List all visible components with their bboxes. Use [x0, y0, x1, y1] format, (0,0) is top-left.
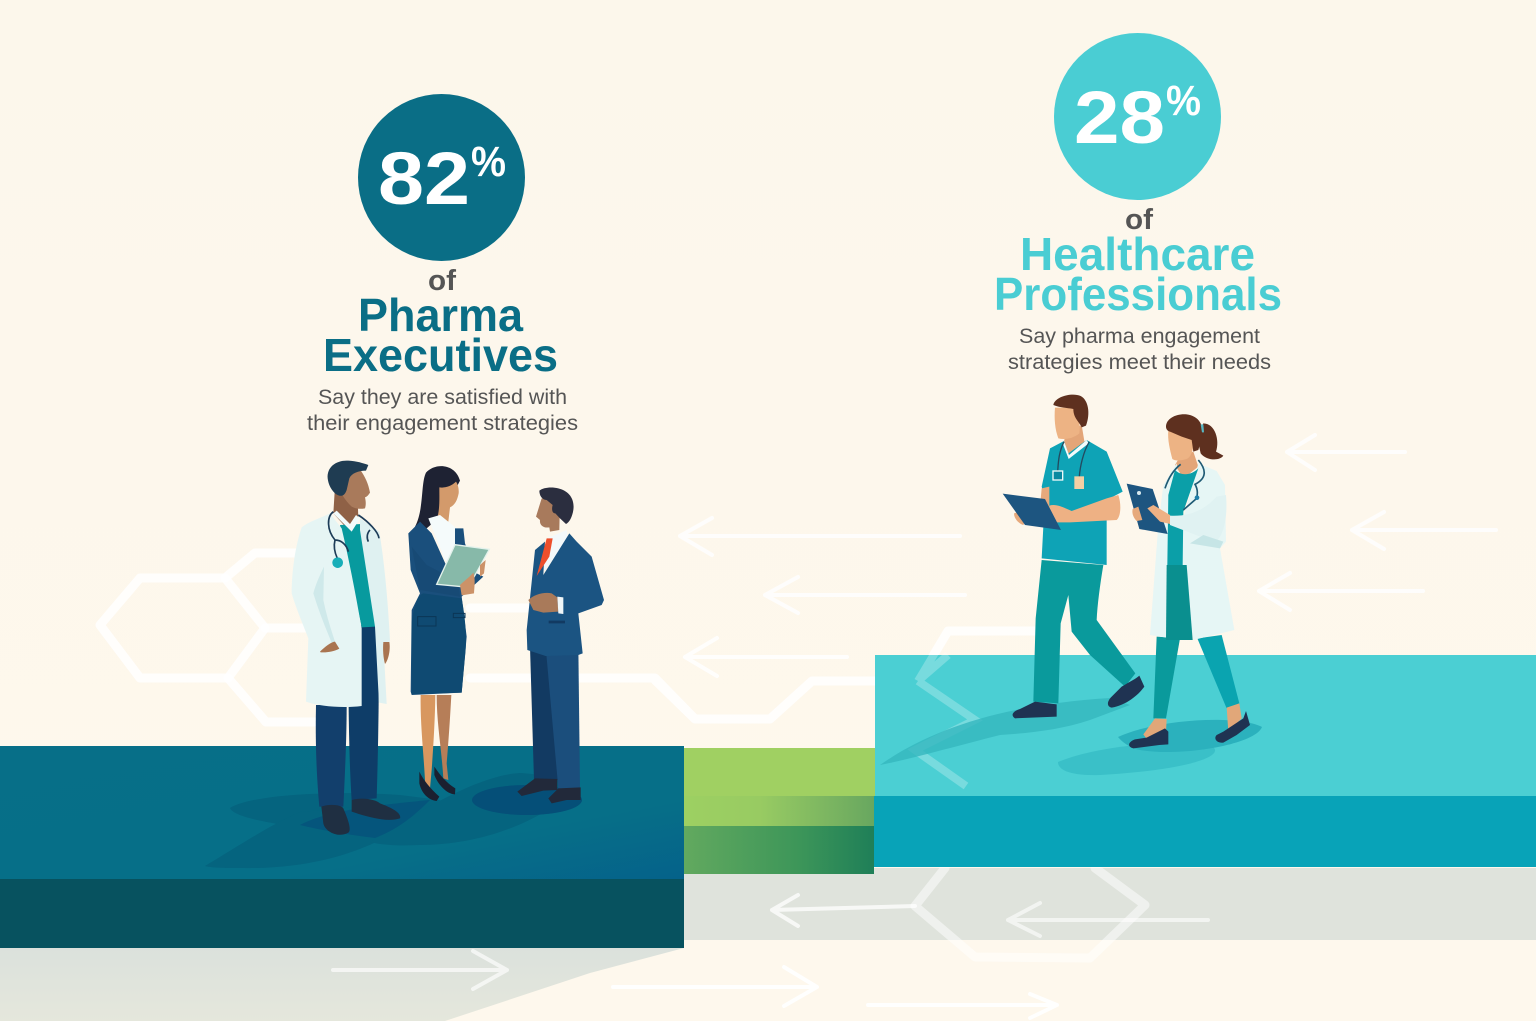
- stat block: pharma executives: [307, 94, 578, 435]
- heading: Healthcare Professionals: [994, 228, 1282, 320]
- heading: Healthcare Professionals: Healthcare: [1020, 228, 1255, 280]
- platform front: [874, 796, 1536, 867]
- description: healthcare: strategies meet their needs: [1008, 351, 1271, 374]
- heading: Pharma Executives: Pharma: [358, 289, 523, 341]
- stat circle: 28%: 28: [1074, 76, 1165, 159]
- figure: businessman: [517, 487, 604, 803]
- description: pharma: their engagement strategies: [307, 412, 578, 435]
- background hexagon network: [100, 553, 1040, 722]
- description: healthcare: Say pharma engagement: [1019, 325, 1260, 348]
- floor shadows: pharma group: [205, 773, 582, 868]
- platform: pharma executives: [0, 746, 684, 948]
- stat circle: 28%: [1054, 33, 1221, 200]
- platform top: [875, 655, 1536, 796]
- heading: Healthcare Professionals: Professionals: [994, 268, 1282, 320]
- label: of: of: [428, 265, 456, 297]
- stat circle: 28%: %: [1166, 77, 1201, 125]
- arrow: upper left 2: [765, 577, 965, 613]
- stat circle: 82%: %: [471, 138, 506, 186]
- platform front: [0, 879, 684, 948]
- figure: businesswoman: [408, 466, 489, 801]
- platform: green connector: [684, 748, 875, 874]
- figures: healthcare group: [1003, 395, 1250, 748]
- figure: male doctor: [292, 461, 400, 835]
- heading: Pharma Executives: Executives: [323, 329, 558, 381]
- background arrows: [680, 435, 1496, 676]
- lower arrows and hexagon: [333, 868, 1208, 1018]
- stat circle: 82%: [358, 94, 525, 261]
- figure: female doctor: [1127, 414, 1250, 748]
- arrow: right 2: [1352, 512, 1496, 549]
- figures: pharma group: [292, 461, 604, 835]
- description: pharma: [307, 386, 578, 435]
- platform top: [0, 746, 684, 879]
- stat block: healthcare professionals: [994, 33, 1282, 374]
- description: healthcare: [1008, 325, 1271, 374]
- arrow: right 1: [1287, 435, 1405, 470]
- hexagon overlay: [915, 631, 975, 786]
- arrow: upper left 3: [685, 638, 847, 676]
- label: of: of: [1125, 204, 1153, 236]
- stat circle: 82%: 82: [378, 137, 470, 220]
- arrow: right 3: [1259, 573, 1423, 610]
- platform: healthcare professionals: [874, 631, 1536, 867]
- heading: Pharma Executives: [323, 289, 558, 381]
- figure: male nurse: [1003, 395, 1144, 718]
- floor shadows: healthcare group: [880, 698, 1262, 775]
- floor shadows: [0, 868, 1536, 1021]
- arrow: upper left 1: [680, 518, 960, 555]
- description: pharma: Say they are satisfied with: [318, 386, 567, 409]
